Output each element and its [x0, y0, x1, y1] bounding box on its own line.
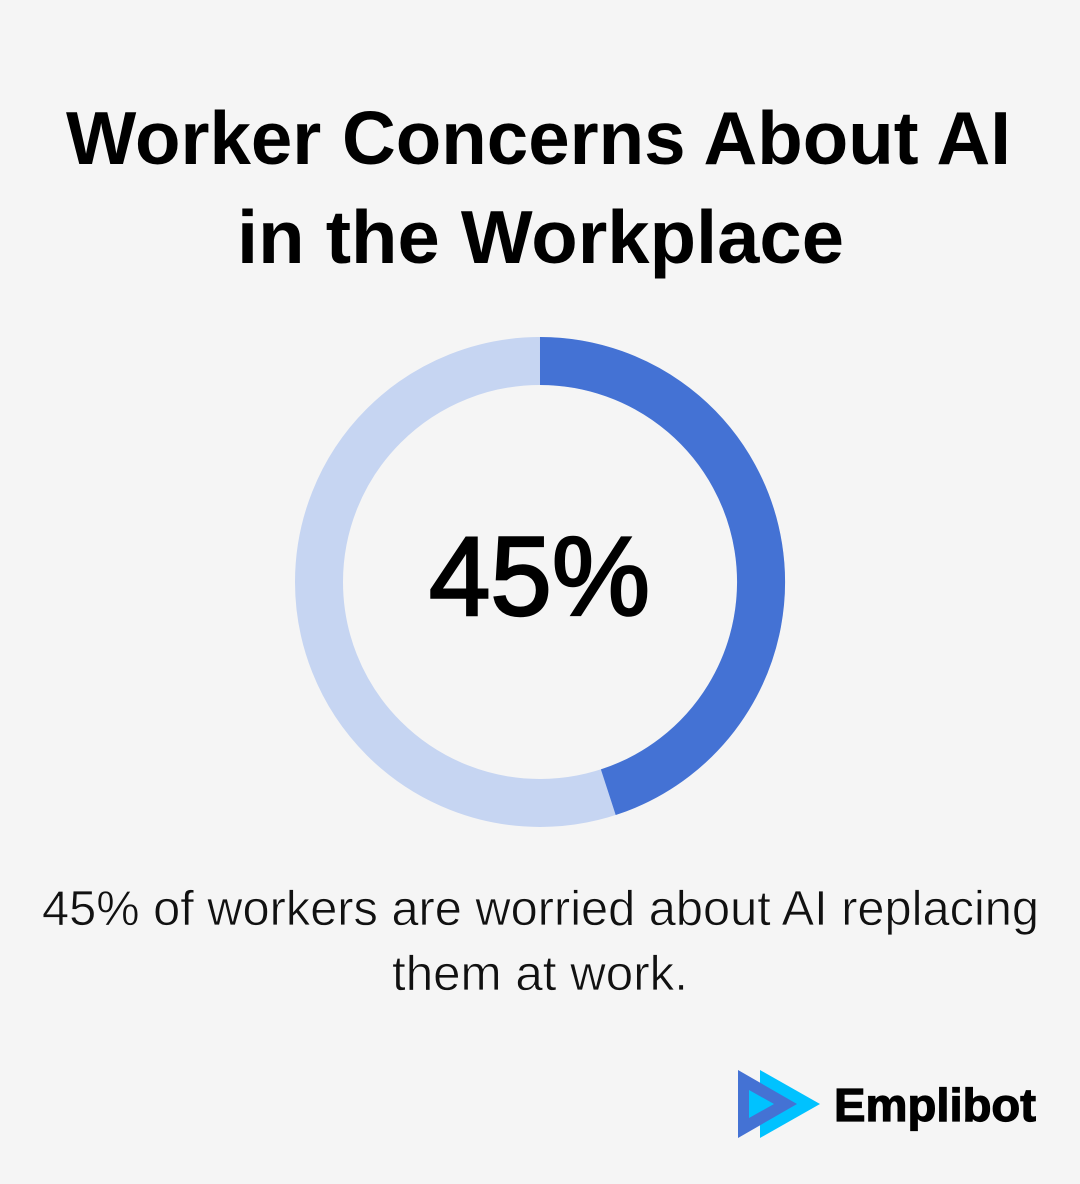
- donut chart: 45%: [319, 361, 761, 803]
- logo wordmark: Emplibot: [834, 1079, 1036, 1131]
- description text: 45% of workers are worried about AI replacing: [42, 882, 1039, 936]
- title: Worker Concerns About AI: [66, 96, 1011, 180]
- donut value: 45%: [429, 514, 650, 639]
- icon: play triangles: [738, 1070, 820, 1138]
- description text: [42, 882, 1039, 1001]
- logo: Emplibot: [738, 1070, 1036, 1138]
- title: in the Workplace: [237, 195, 844, 279]
- description text: them at work.: [392, 947, 688, 1001]
- title: [66, 96, 1011, 279]
